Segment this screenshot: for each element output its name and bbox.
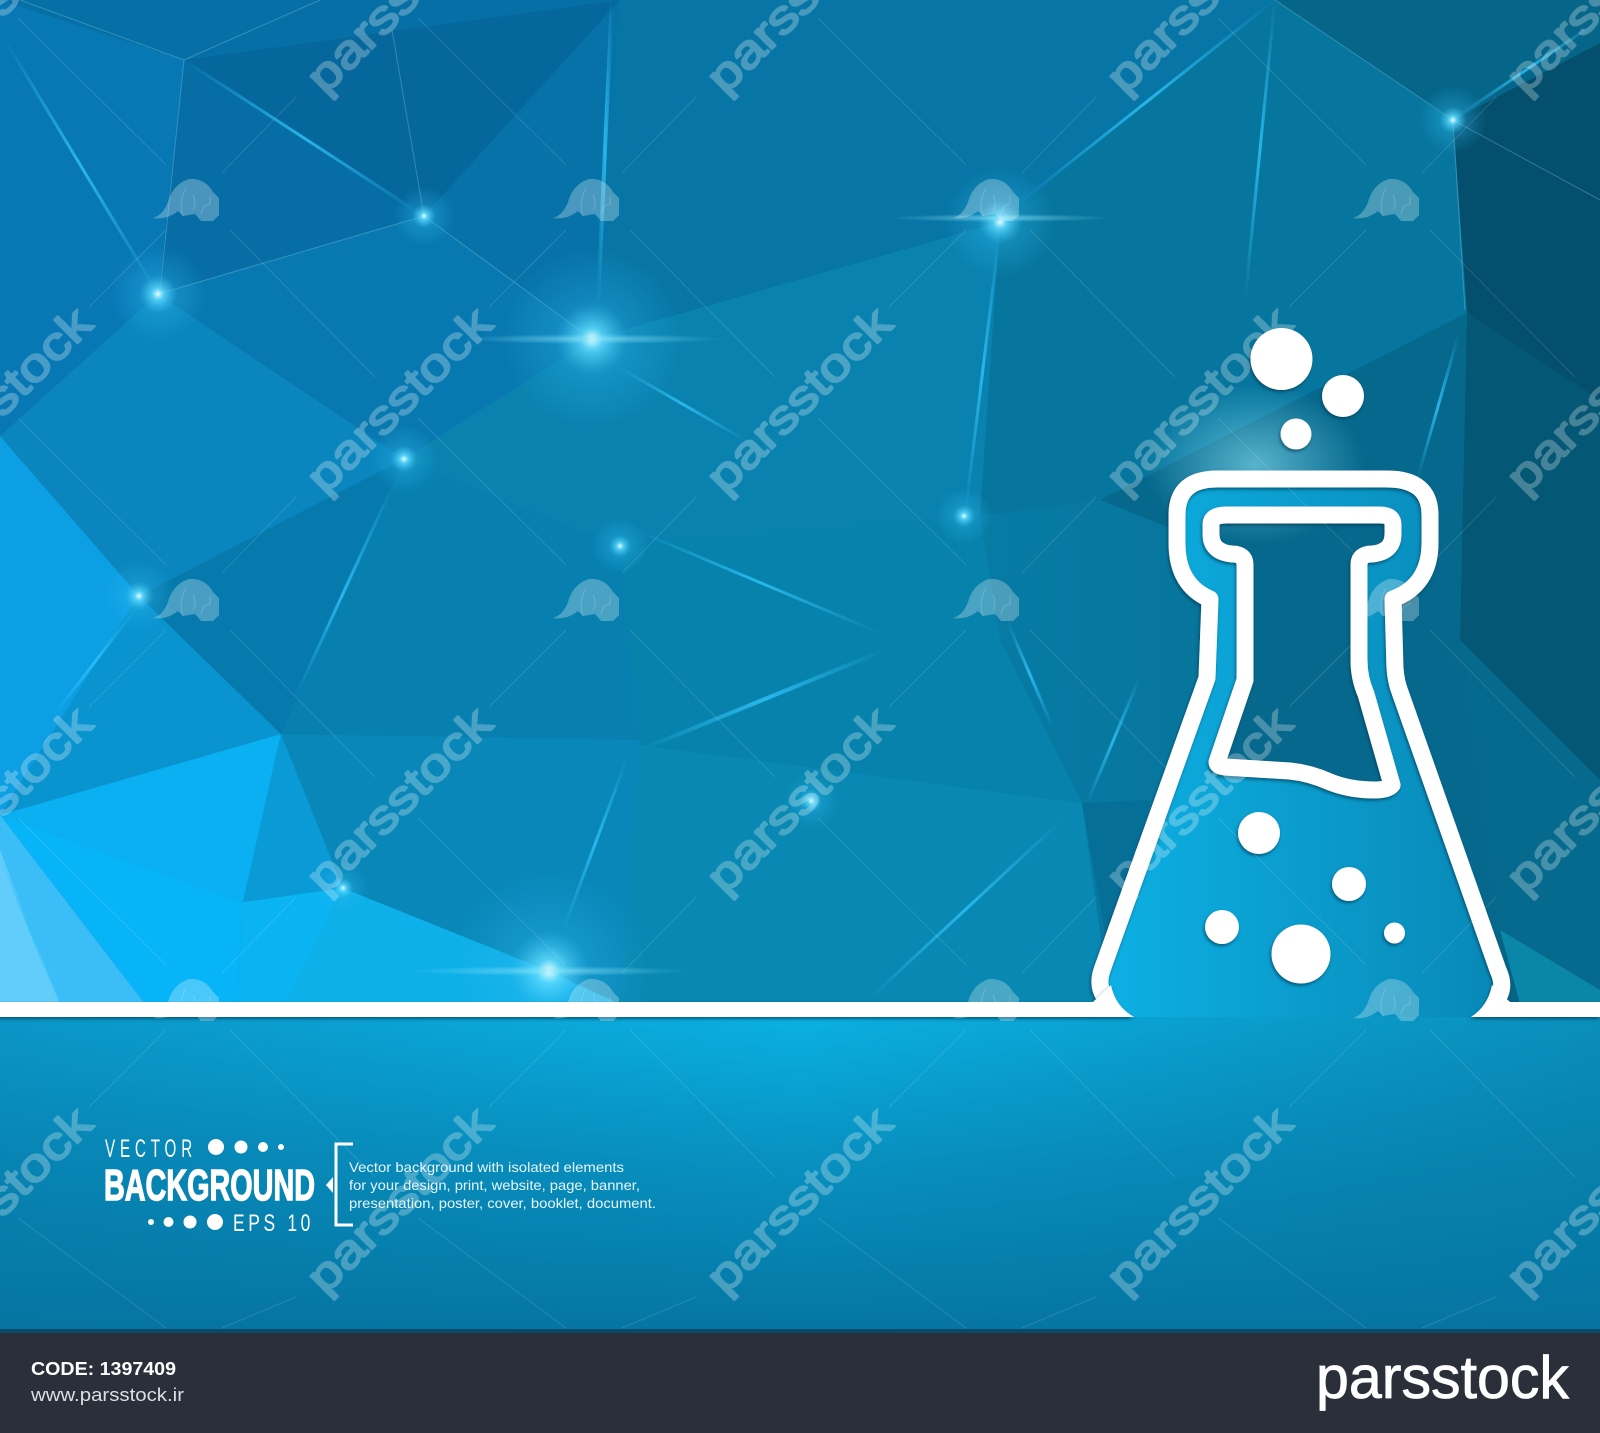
dots after VECTOR: [208, 1139, 284, 1155]
watermark: parsstock text repeated: parsstock: [695, 296, 903, 503]
watermark: parsstock text repeated: parsstock: [1095, 296, 1303, 503]
flask inner neck outline: [1211, 515, 1393, 790]
description lines: presentation, poster, cover, booklet, document.: [349, 1195, 656, 1211]
bottom panel: [0, 1010, 1600, 1333]
flask outer outline: [1100, 479, 1502, 996]
description lines: Vector background with isolated elements: [349, 1159, 624, 1175]
footer code: CODE: 1397409: [31, 1359, 176, 1379]
bracket with notch: [326, 1144, 353, 1225]
watermark: parsstock text repeated: parsstock: [295, 696, 503, 903]
watermark: parsstock text repeated: parsstock: [295, 296, 503, 503]
watermark: parsstock text repeated: parsstock: [295, 1096, 503, 1303]
label: EPS 10: EPS 10: [233, 1210, 314, 1237]
description lines: for your design, print, website, page, banner,: [349, 1177, 640, 1193]
watermark: parsstock text repeated: parsstock: [695, 1096, 903, 1303]
bubbles inside the flask: [1205, 812, 1405, 984]
flask icon: [1100, 328, 1502, 1017]
flask body fill: [1100, 479, 1502, 1017]
footer url: www.parsstock.ir: [30, 1385, 184, 1405]
description lines: [349, 1159, 656, 1211]
bubbles above the flask: [1250, 328, 1364, 450]
light rays: [0, 0, 1600, 1001]
footer bar: [0, 1333, 1600, 1433]
watermark: parsstock text repeated: parsstock: [1095, 696, 1303, 903]
base line with flask feet: [0, 985, 1600, 1017]
background: low-poly field: [0, 0, 1600, 1010]
heading: BACKGROUND: BACKGROUND: [104, 1161, 315, 1210]
heading: VECTOR: VECTOR: [105, 1135, 197, 1163]
watermark: parsstock text repeated: parsstock: [1095, 1096, 1303, 1303]
watermark: parsstock text repeated: parsstock: [695, 696, 903, 903]
footer logo: parsstock: [1316, 1344, 1570, 1411]
text block: vector background badge: [104, 1135, 656, 1237]
light glows: [103, 86, 1487, 1071]
dots before EPS: [148, 1214, 223, 1230]
